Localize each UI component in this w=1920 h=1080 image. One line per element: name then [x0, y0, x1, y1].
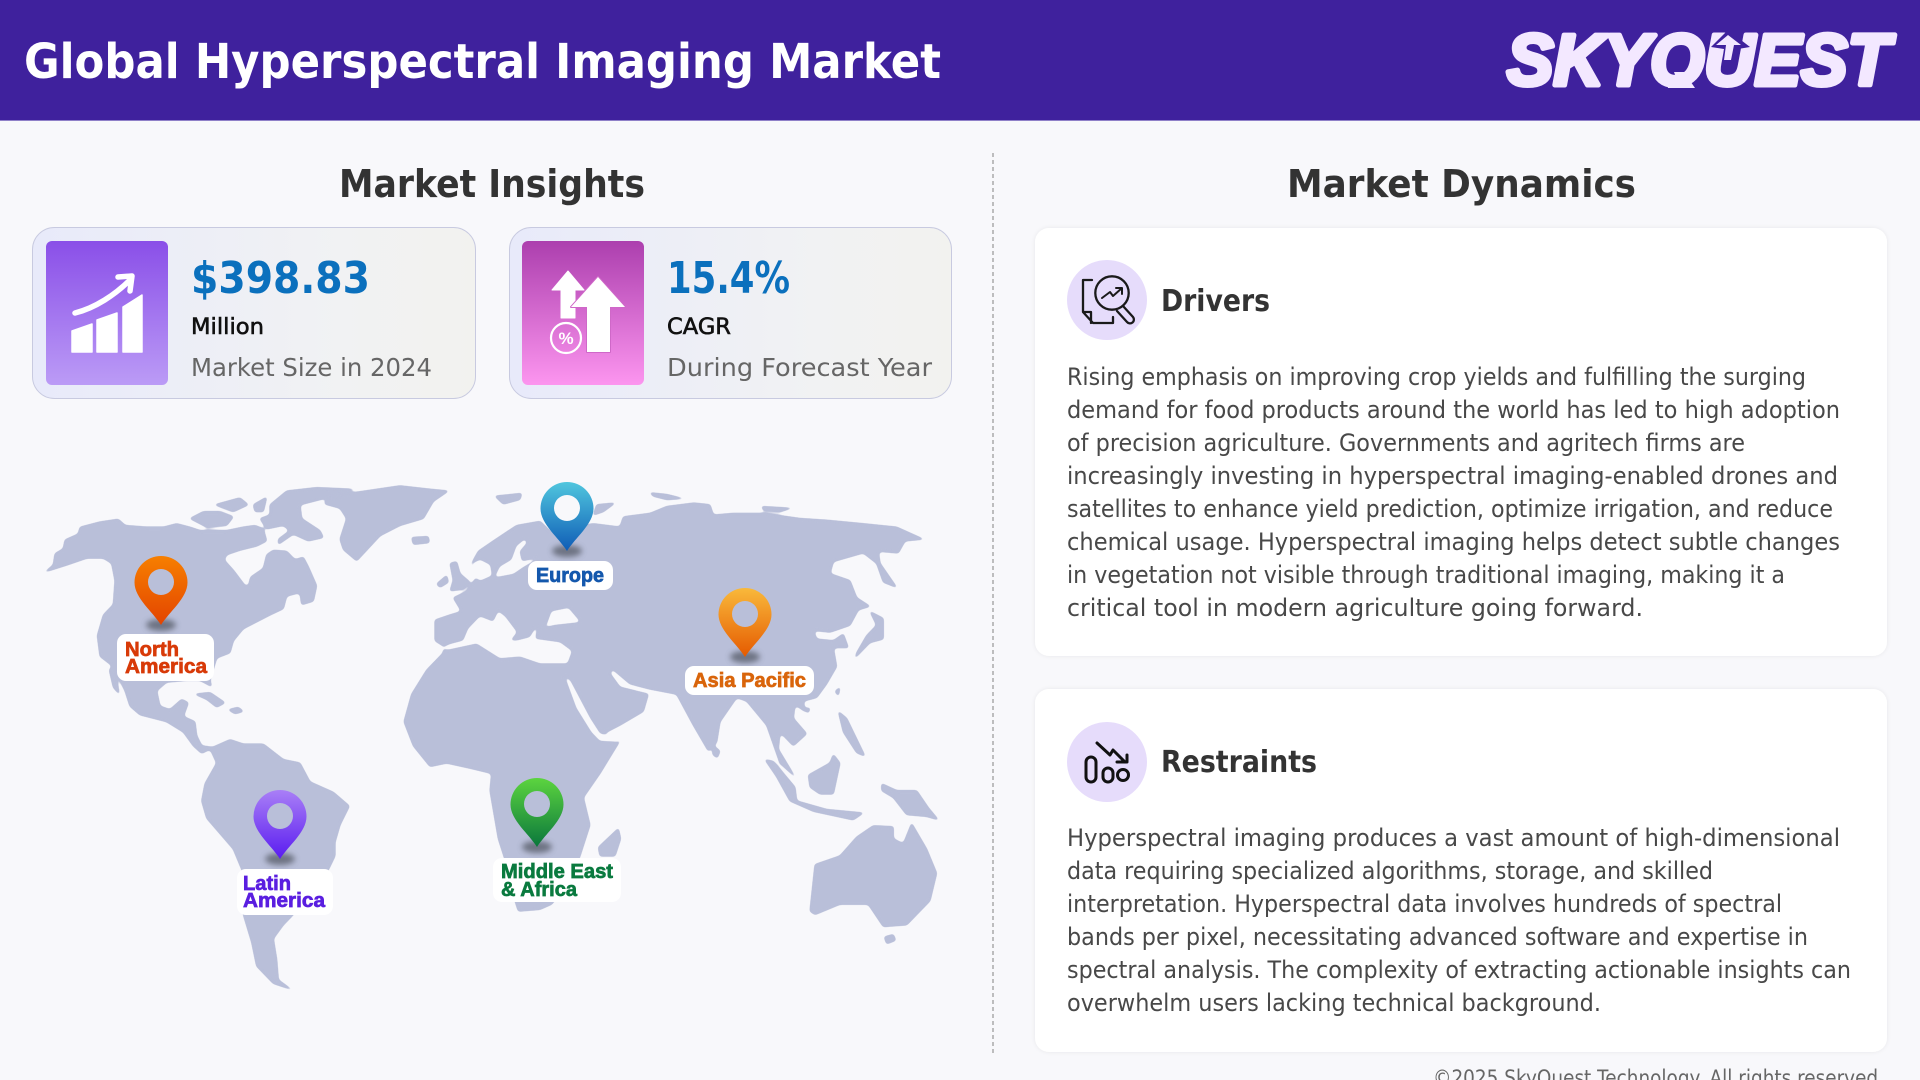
text: restraints description: bands per pixel, necessitating advanced software and expertise in	[1067, 923, 1808, 951]
icon: rising bar chart	[46, 241, 168, 385]
text: restraints description	[1067, 824, 1851, 1017]
panel: CAGR card	[510, 228, 952, 398]
text: restraints description: spectral analysis. The complexity of extracting actionable insights can	[1067, 956, 1851, 984]
text: drivers description: of precision agriculture. Governments and agritech firms are	[1067, 429, 1745, 457]
pin: Middle East and Africa	[493, 778, 621, 902]
text: restraints description: overwhelm users lacking technical background.	[1067, 989, 1601, 1017]
text: drivers description: critical tool in modern agriculture going forward.	[1067, 594, 1643, 622]
label: Middle East and Africa: Middle East	[501, 861, 613, 883]
panel: Restraints	[1035, 689, 1887, 1052]
heading: Market Insights: Market Insights	[339, 162, 645, 206]
label: North America: America	[125, 656, 208, 678]
label: North America	[125, 639, 208, 678]
logo: SkyQuest: SKYQUEST	[1507, 21, 1896, 101]
label: Drivers: Drivers	[1161, 284, 1270, 319]
header band	[0, 0, 1920, 121]
unit: CAGR	[667, 315, 731, 340]
heading: Market Dynamics: Market Dynamics	[1287, 162, 1636, 206]
label: Latin America	[243, 873, 326, 912]
title: Global Hyperspectral Imaging Market	[24, 34, 941, 90]
value: 15.4%	[667, 253, 790, 304]
label: Middle East and Africa	[501, 861, 613, 901]
world map	[45, 486, 938, 990]
label: Middle East and Africa: & Africa	[501, 879, 578, 901]
panel: market size card	[32, 228, 476, 398]
icon: up arrows with percent: %	[558, 329, 574, 348]
text: restraints description: Hyperspectral imaging produces a vast amount of high-dimensional	[1067, 824, 1840, 852]
icon: magnifier on chart document	[1067, 260, 1147, 340]
pin: Latin America	[237, 790, 333, 915]
caption: Market Size in 2024	[191, 353, 432, 382]
pin: North America	[117, 556, 214, 681]
label: Latin America: Latin	[243, 873, 291, 895]
text: drivers description	[1067, 363, 1840, 622]
text: drivers description: in vegetation not visible through traditional imaging, making it a	[1067, 561, 1785, 589]
label: Asia Pacific: Asia Pacific	[693, 670, 806, 692]
map: Americas	[45, 486, 470, 990]
unit: Million	[191, 315, 264, 340]
text: drivers description: satellites to enhance yield prediction, optimize irrigation, and reduce	[1067, 495, 1833, 523]
pin: Asia Pacific	[685, 588, 814, 695]
label: Europe: Europe	[536, 565, 604, 587]
text: drivers description: chemical usage. Hyperspectral imaging helps detect subtle changes	[1067, 528, 1840, 556]
text: drivers description: Rising emphasis on improving crop yields and fulfilling the surging	[1067, 363, 1806, 391]
caption: During Forecast Year	[667, 353, 933, 382]
map: Eurasia, Africa, Oceania	[404, 493, 938, 944]
text: drivers description: demand for food products around the world has led to high adoption	[1067, 396, 1840, 424]
value: $398.83	[191, 253, 370, 304]
logo: SkyQuest	[1505, 32, 1898, 88]
panel: Drivers	[1035, 228, 1887, 656]
label: Restraints: Restraints	[1161, 745, 1317, 780]
icon: declining bars	[1067, 722, 1147, 802]
text: restraints description: data requiring specialized algorithms, storage, and skilled	[1067, 857, 1713, 885]
text: drivers description: increasingly investing in hyperspectral imaging-enabled drones and	[1067, 462, 1838, 490]
label: Latin America: America	[243, 890, 326, 912]
icon: up arrows with percent	[522, 241, 644, 385]
text: restraints description: interpretation. Hyperspectral data involves hundreds of spectral	[1067, 890, 1782, 918]
label: North America: North	[125, 639, 179, 661]
pin: Europe	[528, 482, 613, 590]
